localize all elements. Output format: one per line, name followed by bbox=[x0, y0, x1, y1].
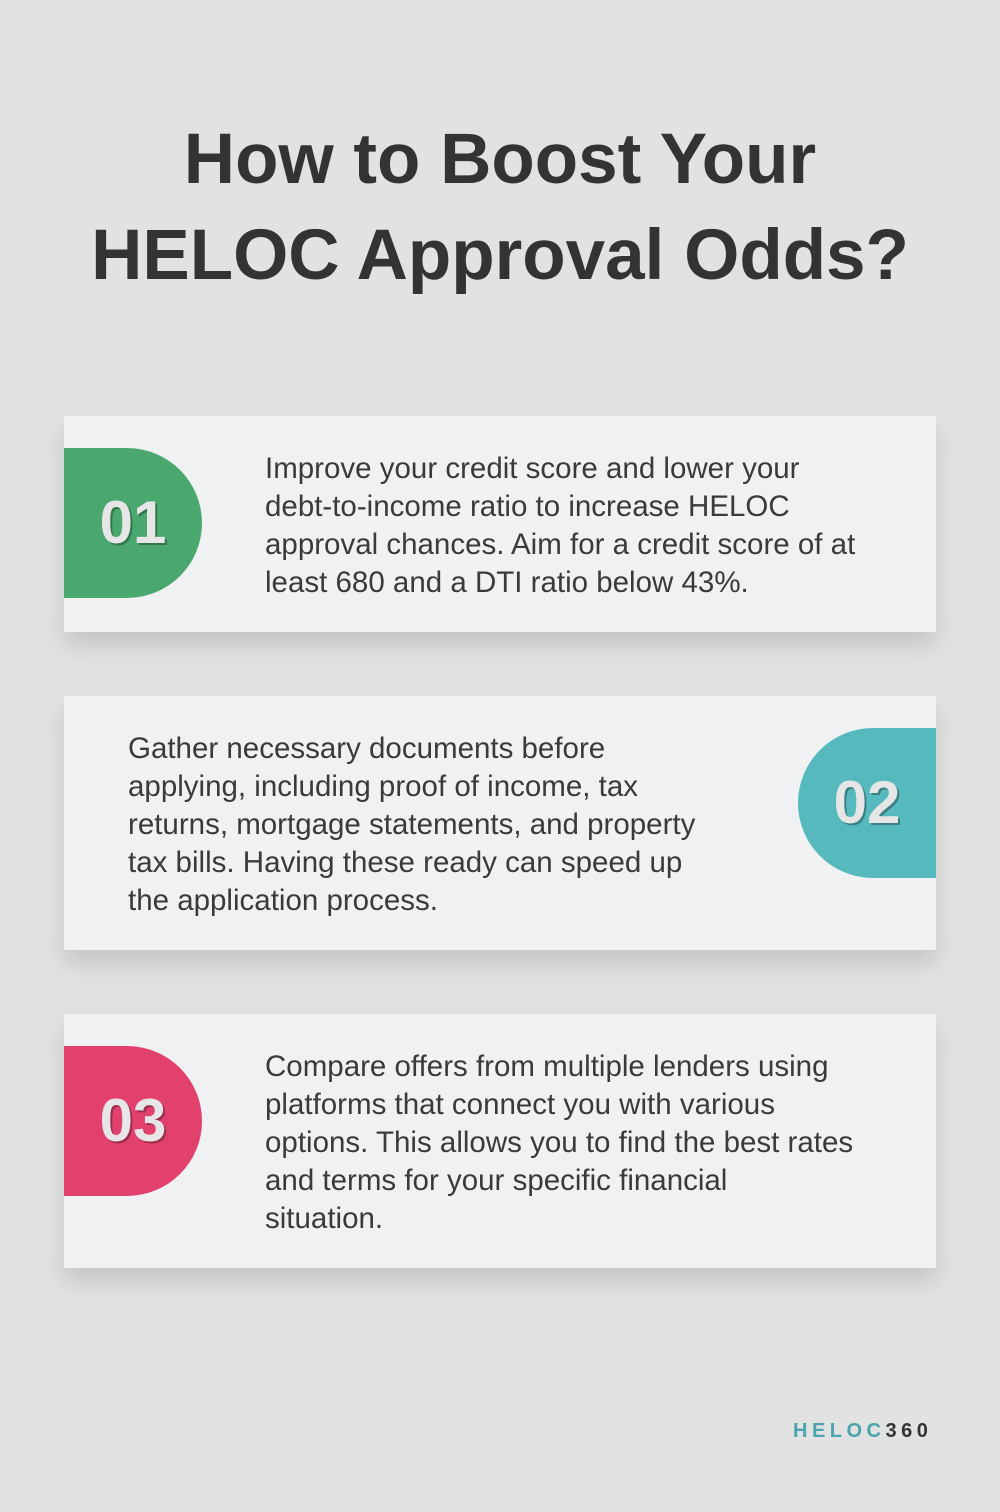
card 1 bbox=[64, 416, 936, 632]
title bbox=[91, 120, 909, 295]
text 1: approval chances. Aim for a credit score of at bbox=[265, 528, 855, 561]
text 2: tax bills. Having these ready can speed up bbox=[128, 846, 682, 879]
text 3: platforms that connect you with various bbox=[265, 1088, 775, 1121]
badge 02 bbox=[798, 728, 936, 878]
title: HELOC Approval Odds? bbox=[91, 216, 909, 295]
text 3: and terms for your specific financial bbox=[265, 1164, 727, 1197]
text 2: the application process. bbox=[128, 884, 438, 917]
card 2 bbox=[64, 696, 936, 950]
text 3: situation. bbox=[265, 1202, 383, 1235]
text 1: Improve your credit score and lower your bbox=[265, 452, 800, 485]
badge 01: 01 bbox=[100, 489, 166, 556]
badge 01 bbox=[64, 448, 202, 598]
logo: HELOC360 bbox=[793, 1420, 932, 1442]
badge 03: 03 bbox=[100, 1087, 166, 1154]
text 3: options. This allows you to find the best rates bbox=[265, 1126, 853, 1159]
text 3 bbox=[265, 1050, 853, 1235]
text 2 bbox=[128, 732, 696, 917]
text 1 bbox=[265, 452, 856, 599]
badge 03 bbox=[64, 1046, 202, 1196]
text 2: Gather necessary documents before bbox=[128, 732, 605, 765]
text 3: Compare offers from multiple lenders using bbox=[265, 1050, 828, 1083]
card 3 bbox=[64, 1014, 936, 1268]
text 1: debt-to-income ratio to increase HELOC bbox=[265, 490, 790, 523]
text 2: returns, mortgage statements, and property bbox=[128, 808, 695, 841]
text 1: least 680 and a DTI ratio below 43%. bbox=[265, 566, 749, 599]
title: How to Boost Your bbox=[184, 120, 816, 199]
badge 02: 02 bbox=[834, 769, 900, 836]
text 2: applying, including proof of income, tax bbox=[128, 770, 638, 803]
